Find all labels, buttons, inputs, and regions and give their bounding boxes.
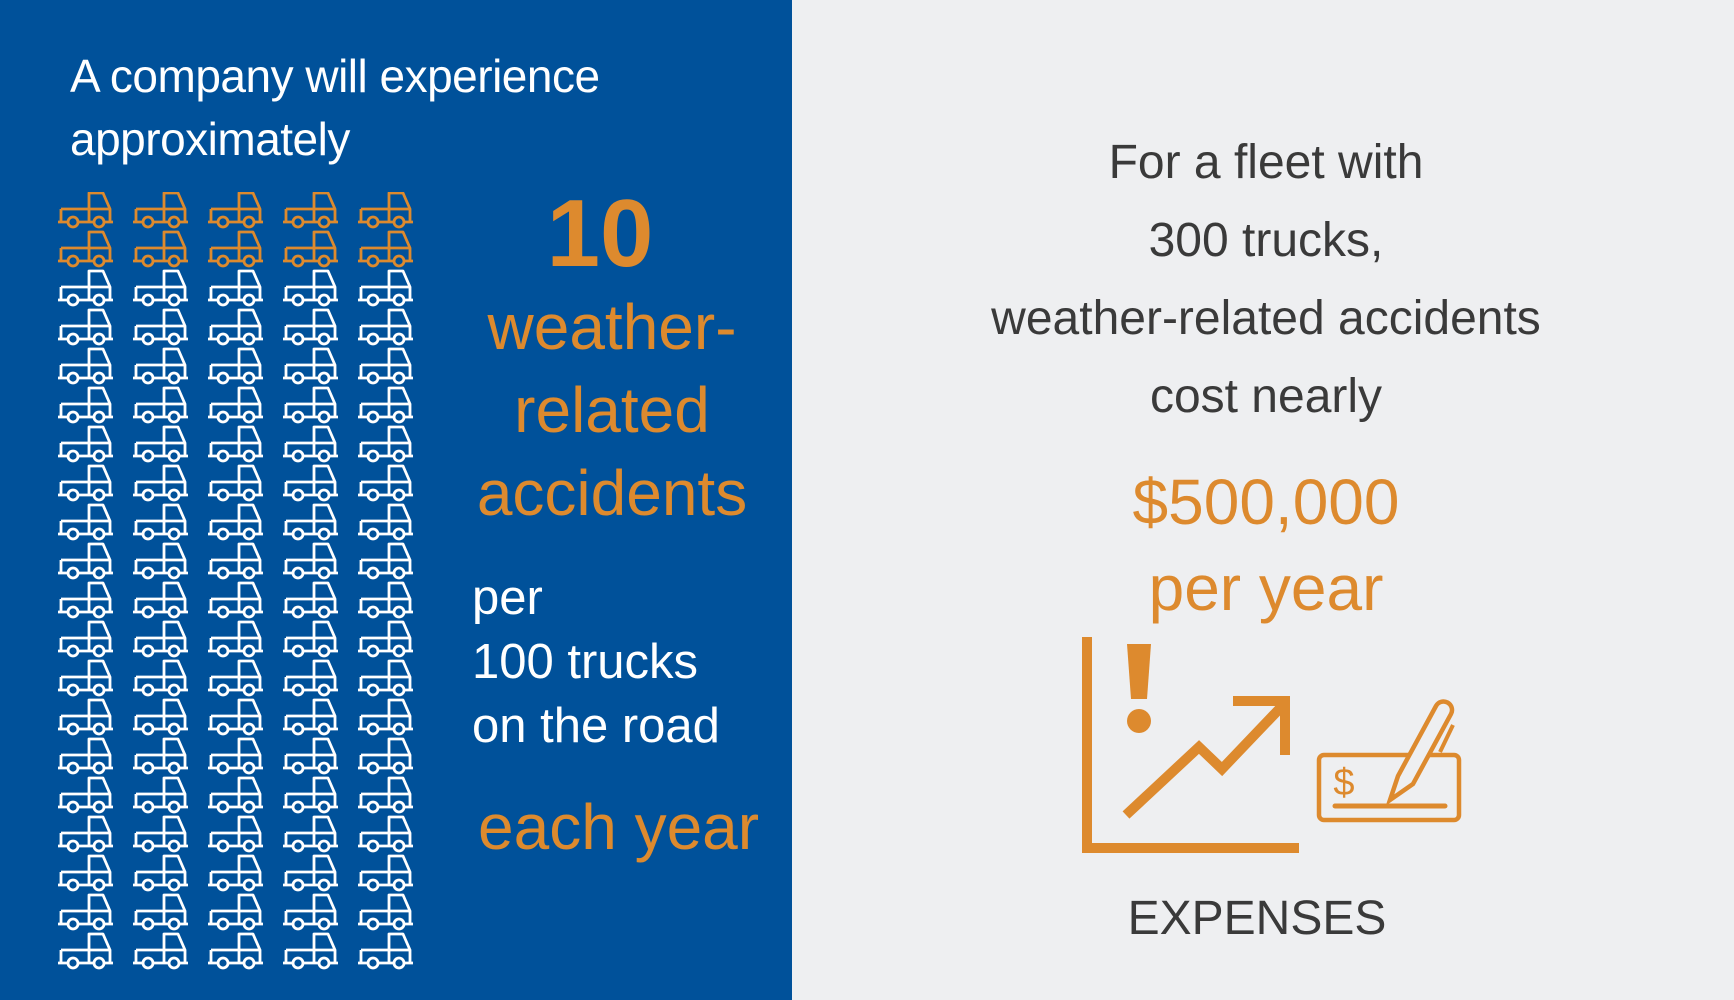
text: weather-related accidents: related — [514, 374, 710, 446]
text: right description: For a fleet with — [1109, 136, 1423, 189]
text: weather-related accidents: accidents — [477, 457, 747, 529]
text: per 100 trucks on the road: per — [472, 571, 543, 625]
truck grid — [58, 192, 413, 970]
text: $500,000 per year: $500,000 — [1133, 466, 1399, 538]
text: right description: cost nearly — [1150, 370, 1382, 423]
icon: expenses chart and cheque: $ — [1333, 762, 1355, 804]
label: EXPENSES: EXPENSES — [1128, 892, 1386, 945]
text: per 100 trucks on the road: 100 trucks — [472, 635, 698, 689]
text: weather-related accidents — [477, 291, 747, 529]
text: per 100 trucks on the road — [472, 571, 720, 753]
text: $500,000 per year — [1133, 466, 1399, 624]
title: approximately — [70, 113, 350, 165]
text: each year: each year — [478, 791, 759, 863]
text: per 100 trucks on the road: on the road — [472, 699, 720, 753]
text: right description — [991, 136, 1541, 423]
big number 10: 10 — [547, 180, 653, 287]
text: right description: 300 trucks, — [1149, 214, 1383, 267]
text: weather-related accidents: weather- — [488, 291, 736, 363]
icon: expenses chart and cheque — [1082, 637, 1462, 853]
text: $500,000 per year: per year — [1149, 552, 1383, 624]
panel: left blue — [0, 0, 792, 1000]
title: A company will experience — [70, 50, 600, 102]
text: right description: weather-related accidents — [991, 292, 1541, 345]
title — [70, 50, 600, 165]
